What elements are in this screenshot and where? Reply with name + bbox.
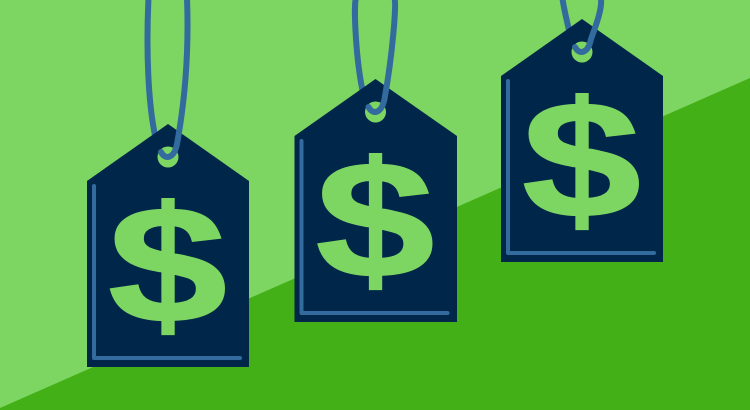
- tag 2 hole: [365, 102, 386, 122]
- tag 3 body: [501, 19, 663, 262]
- tag 2 inner line: [302, 141, 448, 313]
- string: tag 2 back strand: [355, 0, 364, 95]
- tag 1 dollar sign: $: [108, 172, 227, 358]
- price tag 2: [294, 0, 457, 322]
- string: tag 1 front strand: [161, 0, 188, 157]
- string: tag 2 front strand: [368, 0, 395, 112]
- tag 2 body: [294, 79, 457, 322]
- tag 1 body: [87, 124, 249, 367]
- tag 3 dollar sign: $: [522, 67, 641, 253]
- tag 1 inner line: [94, 186, 240, 358]
- tag 2 dollar sign: $: [315, 127, 435, 313]
- string: tag 1 back strand: [147, 0, 156, 140]
- tag 1 hole: [158, 146, 178, 168]
- tag 3 hole: [572, 42, 592, 62]
- string: tag 3 back strand: [562, 0, 570, 35]
- price tag 3: [501, 0, 663, 262]
- tag 3 inner line: [508, 81, 654, 253]
- price tag 1: [87, 0, 249, 367]
- string: tag 3 front strand: [575, 0, 601, 52]
